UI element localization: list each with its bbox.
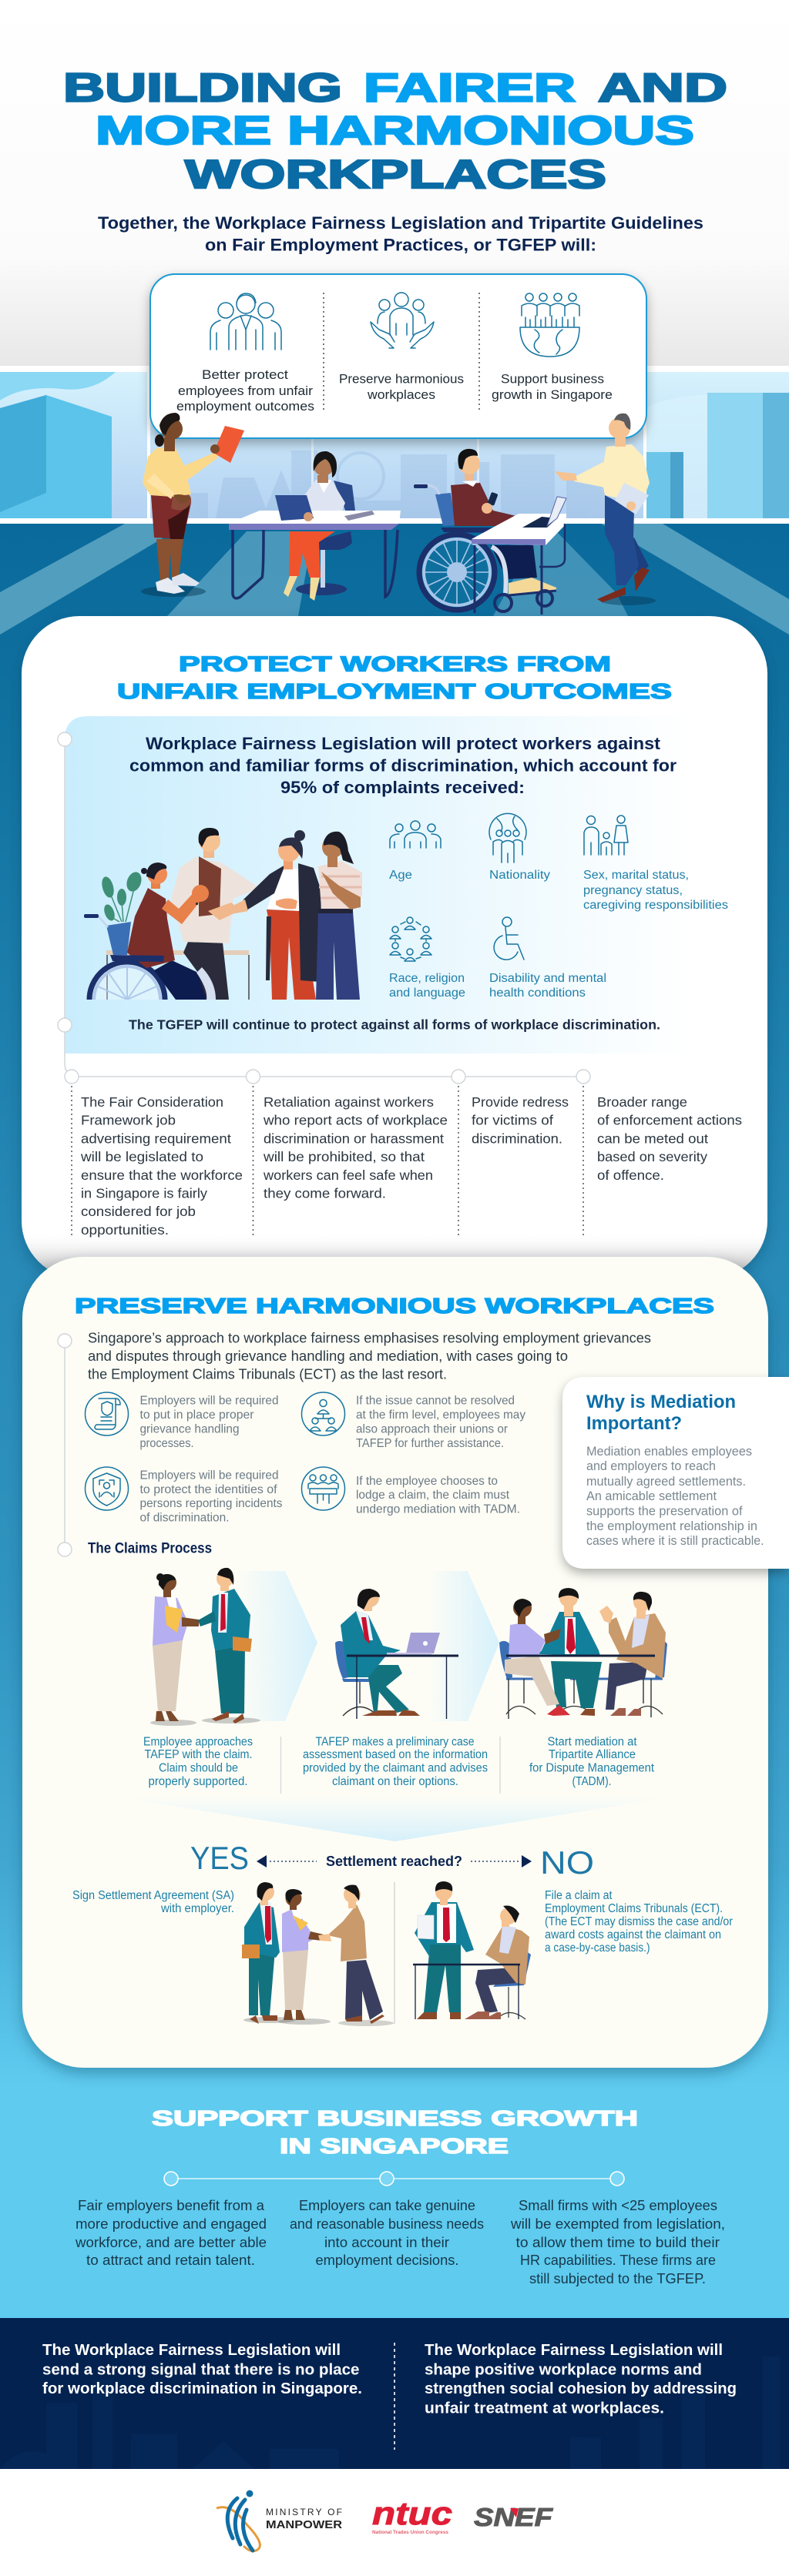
text: better protect: employment outcomes bbox=[176, 399, 314, 414]
column: retaliation: will be prohibited, so that bbox=[263, 1149, 425, 1164]
text: protect identities: persons reporting incidents bbox=[140, 1497, 282, 1510]
text: fair employers bbox=[75, 2198, 267, 2268]
subtitle: Together, the Workplace Fairness Legislation and Tripartite Guidelines bbox=[98, 213, 703, 233]
text: mediation required: If the employee chooses to bbox=[356, 1475, 498, 1488]
text: mediation body: An amicable settlement bbox=[586, 1489, 717, 1503]
caption: employee approaches bbox=[143, 1736, 253, 1788]
text: genuine needs: Employers can take genuine bbox=[299, 2198, 475, 2213]
icon: unions bbox=[302, 1392, 345, 1435]
floor stripes bbox=[0, 524, 789, 635]
chevrons bbox=[237, 1571, 499, 1721]
top background bbox=[0, 0, 789, 366]
caption: tafep assessment: claimant on their options. bbox=[332, 1775, 458, 1788]
tgfep note: The TGFEP will continue to protect against all forms of workplace discrimination. bbox=[129, 1017, 660, 1032]
text: file a claim: Employment Claims Tribunals (ECT). bbox=[545, 1902, 723, 1915]
text: file a claim: award costs against the claimant on bbox=[545, 1928, 721, 1941]
subtitle bbox=[98, 213, 703, 254]
text: preserve harmonious bbox=[339, 371, 464, 402]
caption: tafep assessment bbox=[303, 1736, 488, 1788]
text: unions: at the firm level, employees may bbox=[356, 1409, 525, 1422]
icon: grievance scroll bbox=[85, 1392, 128, 1435]
text: unions: also approach their unions or bbox=[356, 1422, 509, 1435]
column: redress: discrimination. bbox=[472, 1131, 562, 1146]
illustration: pregnant woman with red folder bbox=[141, 413, 244, 597]
text: small firms bbox=[510, 2198, 725, 2286]
text: small firms: to allow them time to build their bbox=[516, 2235, 720, 2250]
text: genuine needs: and reasonable business needs bbox=[290, 2216, 484, 2232]
text: race bbox=[389, 972, 465, 1000]
column: enforcement: Broader range bbox=[597, 1094, 687, 1110]
title: WORKPLACES bbox=[185, 152, 606, 197]
text: support business bbox=[492, 371, 613, 402]
illustration: man in wheelchair with phone bbox=[414, 449, 566, 615]
logo: ntuc: National Trades Union Congress bbox=[372, 2530, 448, 2535]
column: retaliation: discrimination or harassment bbox=[264, 1131, 444, 1146]
column: enforcement: based on severity bbox=[597, 1149, 707, 1164]
text: preserve harmonious: workplaces bbox=[367, 387, 435, 402]
logo: ntuc: ntuc bbox=[372, 2495, 452, 2531]
column: redress: Provide redress bbox=[472, 1094, 569, 1110]
text: sign settlement: Sign Settlement Agreement (SA) bbox=[72, 1889, 234, 1902]
column: fair consideration bbox=[80, 1094, 243, 1238]
text: support business: Support business bbox=[501, 371, 604, 387]
heading: preserve: PRESERVE HARMONIOUS WORKPLACES bbox=[75, 1294, 714, 1318]
text: protect identities bbox=[140, 1469, 282, 1525]
text: mediation body: cases where it is still practicable. bbox=[586, 1534, 764, 1548]
wheelchair wheel bbox=[419, 534, 495, 610]
lead text: common and familiar forms of discrimination, which account for bbox=[129, 756, 677, 775]
heading: protect workers: UNFAIR EMPLOYMENT OUTCOMES bbox=[117, 679, 672, 703]
column: redress: for victims of bbox=[472, 1113, 553, 1128]
text: mediation body bbox=[586, 1445, 764, 1548]
column: retaliation: who report acts of workplace bbox=[263, 1113, 448, 1128]
blue gradient panel bbox=[65, 716, 763, 1054]
text: sex, marital status: caregiving responsibilities bbox=[583, 899, 728, 912]
woman in striped top bbox=[316, 832, 362, 1000]
statement: positive norms: unfair treatment at workplaces. bbox=[425, 2400, 664, 2417]
text: small firms: HR capabilities. These firms are bbox=[520, 2253, 716, 2268]
icon: nationality bbox=[489, 813, 526, 863]
illustration: diverse colleagues bbox=[84, 828, 362, 1000]
column: fair consideration: considered for job bbox=[81, 1204, 196, 1219]
heading: why mediation: Why is Mediation bbox=[586, 1392, 736, 1412]
lead text: 95% of complaints received: bbox=[280, 778, 525, 797]
subtitle: on Fair Employment Practices, or TGFEP will: bbox=[205, 236, 596, 254]
statement: positive norms: shape positive workplace norms and bbox=[425, 2361, 702, 2378]
text: better protect bbox=[176, 367, 314, 414]
statement: positive norms: strengthen social cohesion by addressing bbox=[425, 2380, 737, 2397]
column: retaliation: workers can feel safe when bbox=[263, 1167, 433, 1183]
text: mediation body: supports the preservation of bbox=[586, 1505, 743, 1519]
city skyline bbox=[170, 451, 605, 518]
text: grievance handling: processes. bbox=[140, 1437, 194, 1450]
text: sex, marital status bbox=[583, 869, 728, 912]
caption: start mediation: Start mediation at bbox=[547, 1736, 637, 1748]
text: fair employers: more productive and engaged bbox=[76, 2216, 267, 2232]
text: disability: Disability and mental bbox=[489, 972, 606, 985]
lead text: Workplace Fairness Legislation will protect workers against bbox=[146, 734, 661, 753]
office window scene bbox=[0, 366, 789, 524]
icon: shield identity bbox=[85, 1467, 128, 1510]
heading: support business: IN SINGAPORE bbox=[280, 2134, 509, 2158]
arrow: to yes bbox=[257, 1855, 317, 1868]
icon: family bbox=[584, 816, 628, 855]
column: enforcement bbox=[597, 1094, 742, 1183]
icon: mediation table bbox=[302, 1467, 345, 1510]
column: fair consideration: ensure that the workforce bbox=[81, 1167, 243, 1183]
text: mediation body: the employment relationship in bbox=[586, 1519, 757, 1533]
panel: preserve harmonious workplaces bbox=[22, 1257, 768, 2068]
caption: start mediation: for Dispute Management bbox=[529, 1762, 655, 1775]
text: file a claim: (The ECT may dismiss the case and/or bbox=[545, 1915, 733, 1928]
column: fair consideration: advertising requirement bbox=[81, 1131, 231, 1146]
logo: ministry of manpower: MINISTRY OF bbox=[266, 2507, 342, 2517]
text: grievance handling: grievance handling bbox=[140, 1422, 239, 1435]
statement: positive norms: The Workplace Fairness Legislation will bbox=[425, 2342, 723, 2359]
intro paragraph bbox=[88, 1329, 651, 1382]
text: file a claim: File a claim at bbox=[545, 1889, 613, 1902]
logo: ministry of manpower bbox=[217, 2491, 342, 2551]
yes label: YES bbox=[190, 1840, 249, 1876]
text: genuine needs: into account in their bbox=[324, 2235, 449, 2250]
text: fair employers: Fair employers benefit from a bbox=[78, 2198, 265, 2213]
column: fair consideration: Framework job bbox=[81, 1113, 176, 1128]
text: grievance handling bbox=[140, 1395, 279, 1450]
text: mediation required bbox=[356, 1475, 520, 1516]
caption: start mediation: Tripartite Alliance bbox=[549, 1748, 636, 1761]
text: mediation required: undergo mediation with TADM. bbox=[356, 1503, 520, 1516]
caption: tafep assessment: provided by the claimant and advises bbox=[303, 1762, 488, 1775]
text: file a claim: a case-by-case basis.) bbox=[545, 1941, 650, 1955]
icon: age bbox=[390, 821, 441, 848]
column: retaliation: Retaliation against workers bbox=[264, 1094, 434, 1110]
text: sex, marital status: pregnancy status, bbox=[583, 884, 683, 897]
caption: employee approaches: Employee approaches bbox=[143, 1736, 253, 1748]
settlement decision: Settlement reached? bbox=[326, 1854, 462, 1869]
text: unions: TAFEP for further assistance. bbox=[356, 1437, 504, 1450]
column: fair consideration: The Fair Consideration bbox=[81, 1094, 223, 1110]
column: enforcement: can be meted out bbox=[597, 1131, 708, 1146]
panel: protect workers bbox=[22, 616, 767, 1278]
statement: strong signal: The Workplace Fairness Legislation will bbox=[42, 2342, 341, 2359]
icon: race, religion bbox=[390, 917, 431, 961]
statement: positive norms bbox=[425, 2342, 737, 2417]
icon: people and globe bbox=[520, 293, 579, 357]
column: enforcement: of offence. bbox=[597, 1167, 664, 1183]
icon: hands holding people bbox=[371, 293, 434, 348]
statement: strong signal: send a strong signal that there is no place bbox=[42, 2361, 359, 2378]
text: small firms: will be exempted from legislation, bbox=[510, 2216, 725, 2232]
process captions bbox=[143, 1736, 655, 1788]
text: race: Race, religion bbox=[389, 972, 465, 985]
text: disability bbox=[489, 972, 606, 1000]
heading: why mediation bbox=[586, 1392, 736, 1434]
illustration: standing man with papers bbox=[555, 414, 656, 605]
caption: start mediation: (TADM). bbox=[572, 1775, 612, 1788]
section: support business growth bbox=[75, 2106, 725, 2286]
text: race: and language bbox=[389, 987, 465, 1000]
arrow: to no bbox=[471, 1855, 532, 1868]
text: support business: growth in Singapore bbox=[492, 387, 613, 402]
text: unions bbox=[356, 1395, 525, 1450]
text: sex, marital status: Sex, marital status, bbox=[583, 869, 689, 882]
text: protect identities: to protect the identities of bbox=[140, 1483, 277, 1496]
illustration: employee meets tafep officer bbox=[150, 1568, 260, 1726]
caption: employee approaches: properly supported. bbox=[148, 1775, 248, 1788]
text: better protect: employees from unfair bbox=[178, 384, 313, 398]
heading: support business: SUPPORT BUSINESS GROWTH bbox=[152, 2106, 638, 2130]
logo: ministry of manpower: MANPOWER bbox=[266, 2518, 342, 2531]
text: mediation required: lodge a claim, the claim must bbox=[356, 1489, 510, 1502]
illustration: filing a claim bbox=[413, 1881, 531, 2019]
caption: start mediation bbox=[529, 1736, 655, 1788]
text: better protect: Better protect bbox=[202, 367, 288, 382]
text: file a claim bbox=[545, 1889, 733, 1955]
column: fair consideration: opportunities. bbox=[81, 1222, 169, 1238]
no label: NO bbox=[540, 1844, 594, 1881]
text: protect identities: of discrimination. bbox=[140, 1512, 230, 1525]
title bbox=[63, 66, 727, 197]
text: sign settlement: with employer. bbox=[160, 1902, 234, 1915]
title: AND bbox=[598, 66, 727, 111]
text: mediation body: mutually agreed settlements. bbox=[586, 1475, 746, 1489]
icon: group of employees bbox=[210, 293, 281, 350]
timeline bbox=[164, 2172, 624, 2186]
column: redress bbox=[472, 1094, 569, 1146]
caption: employee approaches: TAFEP with the claim. bbox=[145, 1748, 253, 1761]
caption: tafep assessment: TAFEP makes a preliminary case bbox=[316, 1736, 475, 1748]
text: small firms: Small firms with <25 employees bbox=[519, 2198, 717, 2213]
statement: strong signal: for workplace discrimination in Singapore. bbox=[42, 2380, 362, 2397]
column: retaliation bbox=[263, 1094, 448, 1201]
title: MORE HARMONIOUS bbox=[96, 109, 694, 153]
column: retaliation: they come forward. bbox=[264, 1186, 386, 1201]
intro paragraph: Singapore’s approach to workplace fairness emphasises resolving employment grievances bbox=[88, 1329, 651, 1346]
heading: why mediation: Important? bbox=[586, 1413, 682, 1434]
heading: support business bbox=[152, 2106, 638, 2158]
text: fair employers: workforce, and are better able bbox=[75, 2235, 267, 2250]
column: fair consideration: will be legislated to bbox=[80, 1149, 203, 1164]
text: small firms: still subjected to the TGFEP. bbox=[529, 2271, 706, 2286]
text: fair employers: to attract and retain talent. bbox=[86, 2253, 255, 2268]
wheelchair wheel bbox=[86, 961, 168, 1000]
logo: snef: SNEF bbox=[474, 2503, 553, 2531]
illustration: settlement handshake bbox=[242, 1882, 394, 2026]
heading: protect workers bbox=[117, 652, 672, 703]
text: grievance handling: to put in place proper bbox=[140, 1409, 254, 1422]
heading: protect workers: PROTECT WORKERS FROM bbox=[179, 652, 611, 676]
panel: protect workers: Age bbox=[389, 869, 412, 882]
icon: disability bbox=[494, 917, 524, 960]
text: preserve harmonious: Preserve harmonious bbox=[339, 371, 464, 387]
text: disability: health conditions bbox=[489, 987, 586, 1000]
woman in black cardigan bbox=[227, 830, 321, 1000]
text: mediation body: and employers to reach bbox=[586, 1459, 716, 1473]
text: genuine needs: employment decisions. bbox=[316, 2253, 459, 2268]
title: FAIRER bbox=[364, 66, 576, 111]
text: mediation body: Mediation enables employees bbox=[586, 1445, 752, 1459]
panel: three goals bbox=[150, 274, 646, 438]
text: unions: If the issue cannot be resolved bbox=[356, 1395, 515, 1408]
down arrow band bbox=[118, 1797, 670, 1841]
lead text bbox=[129, 734, 677, 797]
band: closing statements bbox=[0, 2318, 789, 2469]
caption: tafep assessment: assessment based on the information bbox=[303, 1748, 488, 1761]
panel: why is mediation important bbox=[562, 1377, 789, 1569]
intro paragraph: and disputes through grievance handling and mediation, with cases going to bbox=[88, 1348, 568, 1364]
intro paragraph: the Employment Claims Tribunals (ECT) as the last resort. bbox=[88, 1366, 447, 1382]
statement: strong signal bbox=[42, 2342, 362, 2397]
settlement decision bbox=[257, 1854, 532, 1869]
title: BUILDING bbox=[63, 66, 342, 111]
text: sign settlement bbox=[72, 1889, 234, 1915]
illustration: mediation meeting bbox=[499, 1588, 667, 1719]
illustration: woman at desk with laptop bbox=[228, 451, 401, 601]
text: grievance handling: Employers will be required bbox=[140, 1395, 279, 1408]
caption: employee approaches: Claim should be bbox=[159, 1762, 238, 1775]
text: genuine needs bbox=[290, 2198, 484, 2268]
heading: claims process: The Claims Process bbox=[88, 1540, 212, 1557]
column: fair consideration: in Singapore is fairly bbox=[81, 1186, 207, 1201]
panel: protect workers: Nationality bbox=[489, 869, 550, 882]
column: enforcement: of enforcement actions bbox=[597, 1113, 742, 1128]
illustration: officer at laptop bbox=[335, 1589, 458, 1719]
text: protect identities: Employers will be required bbox=[140, 1469, 279, 1482]
